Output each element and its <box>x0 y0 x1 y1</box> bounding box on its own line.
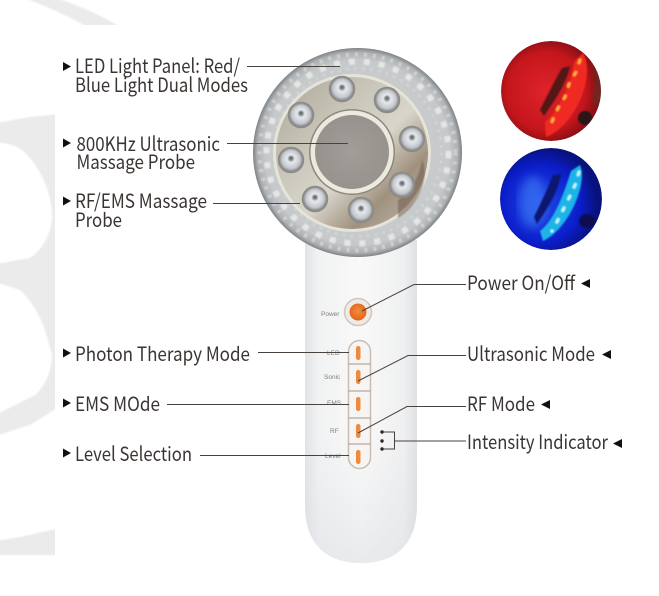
icon: red light mode photo <box>501 41 602 141</box>
label: LED light panel: Blue Light Dual Modes <box>75 69 248 98</box>
label: ultrasonic probe: Massage Probe <box>76 146 195 175</box>
leader lines <box>167 66 466 456</box>
label: level selection: Level Selection <box>75 438 192 467</box>
intensity indicator dots <box>380 430 384 451</box>
indicator: Sonic <box>356 370 360 384</box>
button labels: Sonic <box>324 374 341 381</box>
label: RF/EMS probe: Probe <box>75 204 122 233</box>
indicator: Level <box>356 450 360 464</box>
mode button column <box>348 340 371 468</box>
button labels <box>324 350 342 460</box>
icon: blue light mode photo <box>500 148 602 250</box>
power button <box>321 298 372 326</box>
label: RF mode: RF Mode <box>467 388 535 417</box>
LED light ring <box>253 48 462 257</box>
indicator: LED <box>356 346 360 360</box>
ultrasonic probe <box>309 109 395 195</box>
indicator: EMS <box>356 397 360 411</box>
label: ultrasonic probe: 800KHz Ultrasonic <box>76 128 220 157</box>
label: RF/EMS probe <box>63 185 207 233</box>
power button: Power <box>321 311 340 318</box>
label: EMS mode: EMS MOde <box>75 388 160 417</box>
button labels: EMS <box>327 400 342 407</box>
label: ultrasonic probe <box>63 128 220 175</box>
label: LED light panel <box>63 50 248 98</box>
button labels: RF <box>330 428 339 435</box>
indicator: RF <box>356 424 360 438</box>
label: RF/EMS probe: RF/EMS Massage <box>75 185 207 214</box>
label: ultrasonic mode: Ultrasonic Mode <box>467 338 595 367</box>
label: photon therapy: Photon Therapy Mode <box>75 338 250 367</box>
label: LED light panel: LED Light Panel: Red/ <box>75 50 240 79</box>
massage balls <box>278 76 424 222</box>
device handle <box>305 240 417 563</box>
device head <box>253 48 462 257</box>
background watermark <box>0 0 125 555</box>
button labels: Level <box>325 453 341 460</box>
label: power on/off: Power On/Off <box>467 267 576 296</box>
label: intensity indicator: Intensity Indicator <box>467 426 608 455</box>
button labels: LED <box>327 350 340 357</box>
chrome plate <box>273 74 431 232</box>
